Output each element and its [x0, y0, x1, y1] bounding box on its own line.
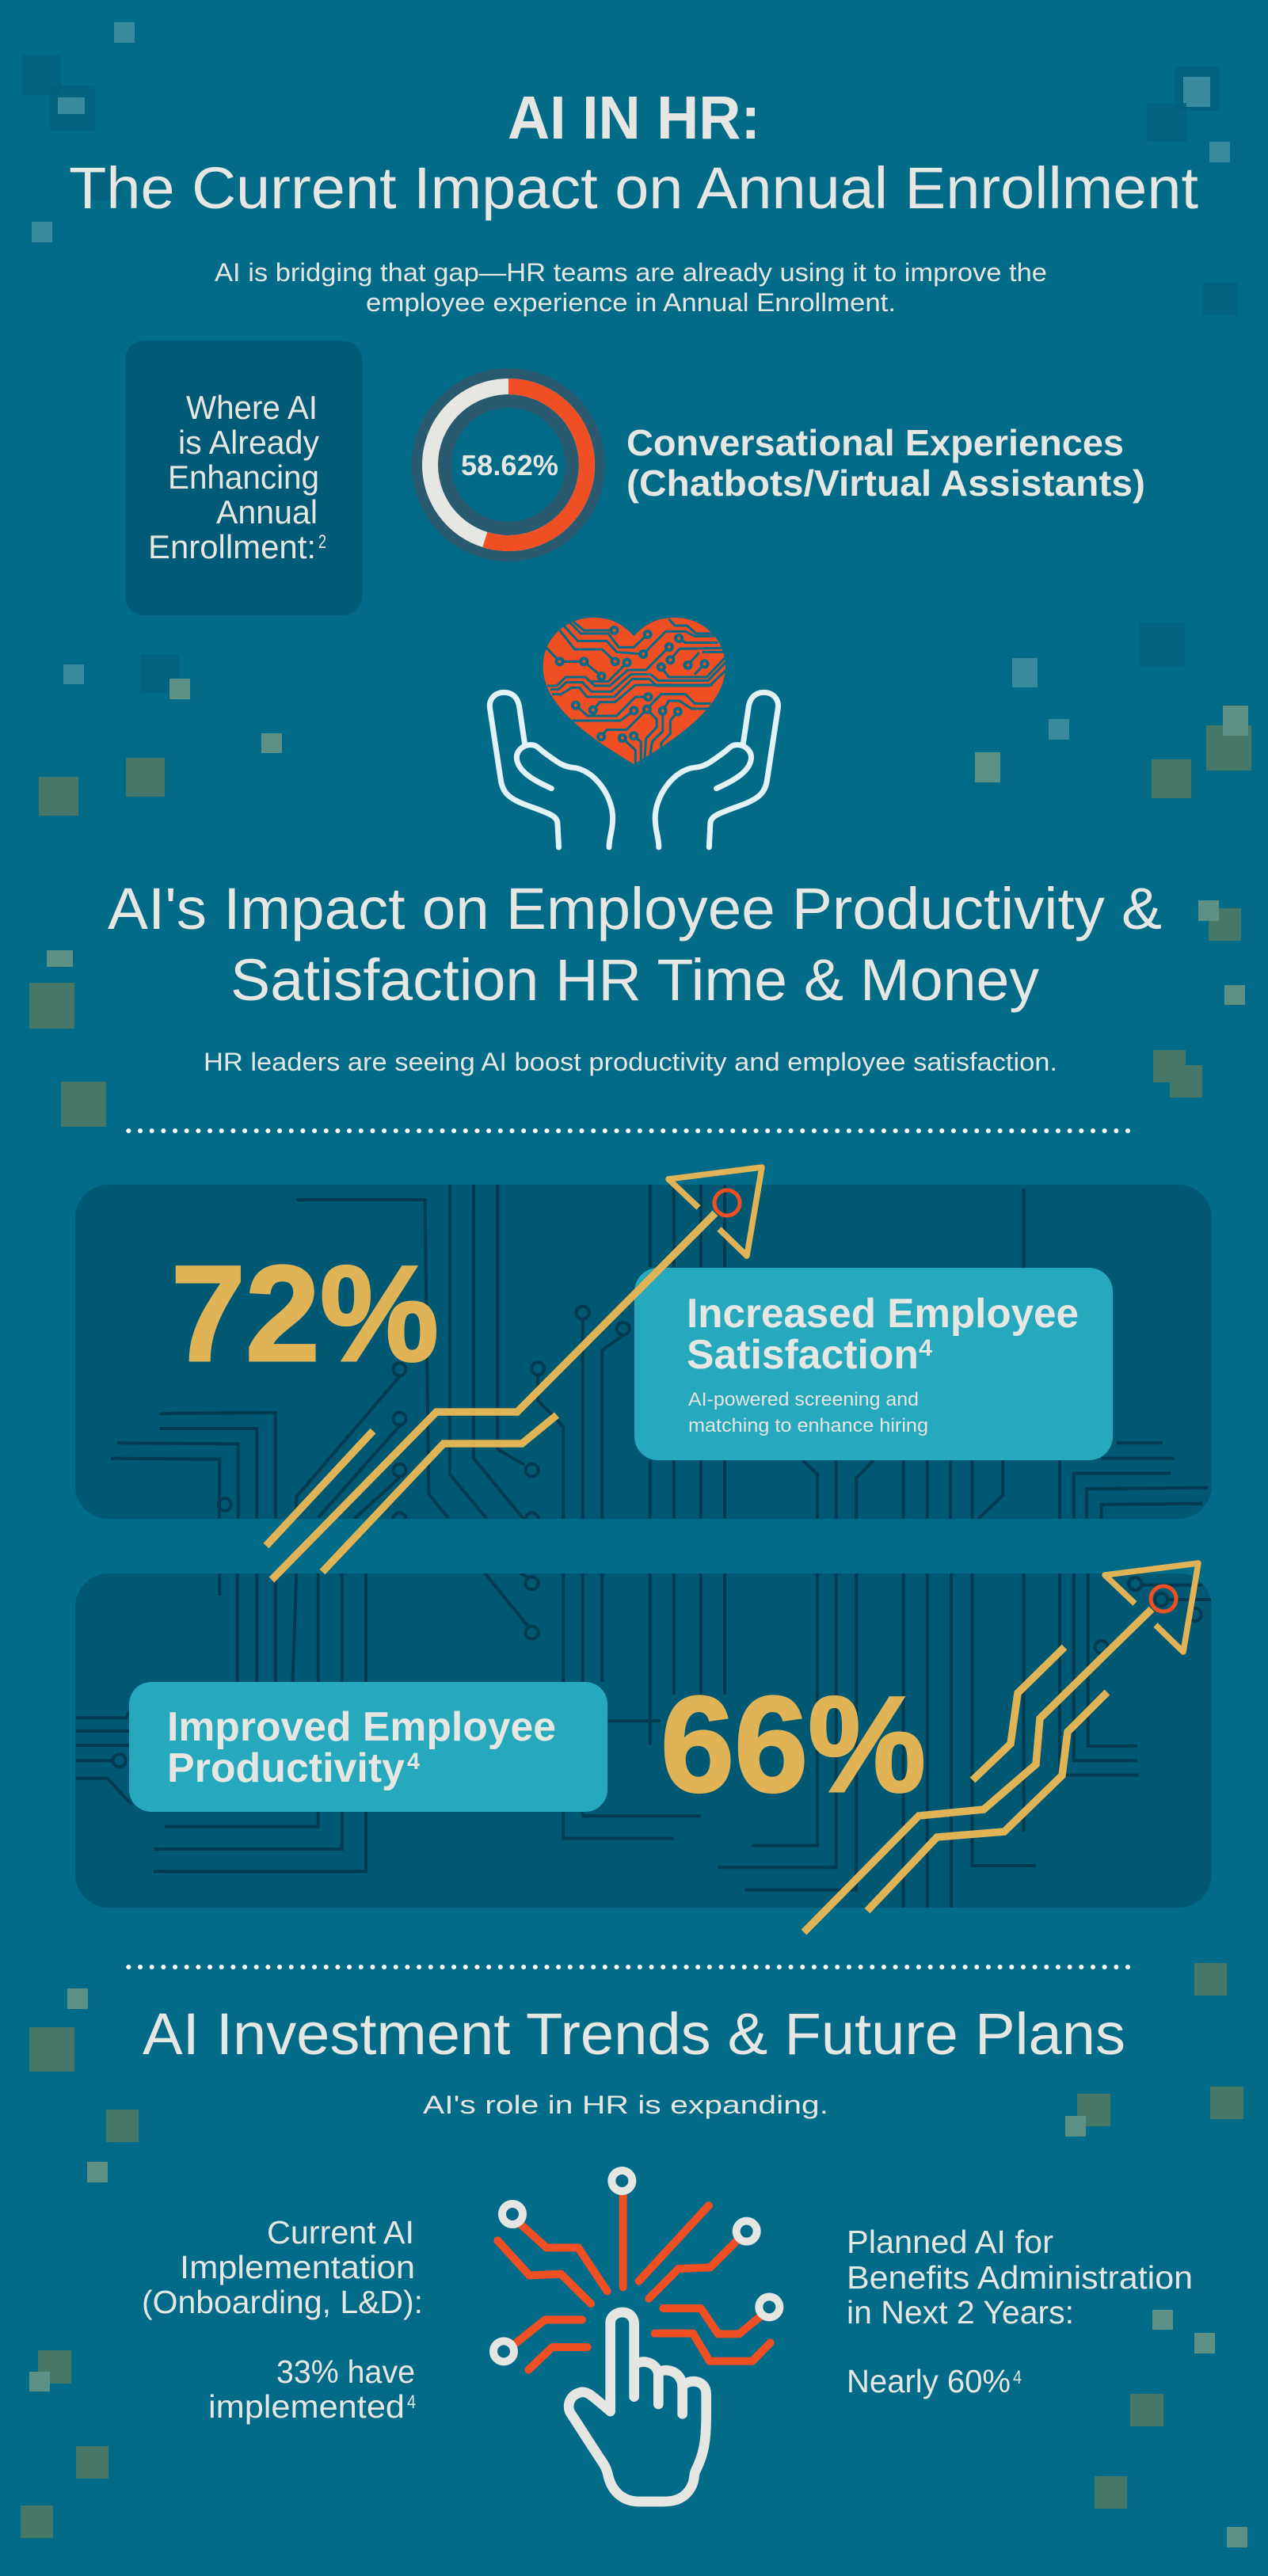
donut label: [626, 422, 1145, 504]
callout: improved employee productivity: [129, 1682, 607, 1812]
text: current AI implementation: (Onboarding, L&D):: [142, 2284, 423, 2320]
callout: increased employee satisfaction: Increased Employee: [687, 1291, 1079, 1337]
heading: impact on productivity and satisfaction: Satisfaction HR Time & Money: [230, 947, 1039, 1013]
text: current AI implementation: Current AI: [267, 2214, 414, 2251]
donut label: Conversational Experiences: [626, 422, 1124, 463]
icon: pointing hand with circuit traces: [493, 2171, 779, 2502]
panel: 72% satisfaction background: [75, 1185, 1212, 1525]
intro text: employee experience in Annual Enrollment.: [366, 288, 896, 317]
text: planned AI for benefits administration: Planned AI for: [847, 2224, 1053, 2260]
title: AI IN HR:: [508, 84, 760, 152]
donut label: (Chatbots/Virtual Assistants): [626, 462, 1145, 504]
stat: 66%: 66%: [661, 1669, 926, 1821]
donut chart: 58.62%: 58.62%: [461, 449, 558, 481]
callout: improved employee productivity: 4: [407, 1748, 420, 1775]
text: current AI implementation: 33% have: [276, 2353, 415, 2390]
callout: improved employee productivity: Productivity: [167, 1745, 405, 1791]
text: planned AI for benefits administration: Nearly 60%: [847, 2363, 1011, 2399]
callout: improved employee productivity: Improved Employee: [167, 1704, 556, 1750]
panel: where AI is already enhancing annual enrollment: Enhancing: [168, 459, 319, 496]
panel: where AI is already enhancing annual enrollment: Where AI: [186, 389, 318, 426]
callout: increased employee satisfaction: Satisfaction: [687, 1332, 919, 1378]
donut chart: 58.62%: [430, 386, 587, 543]
arrow: productivity growth: [804, 1563, 1198, 1932]
panel: where AI is already enhancing annual enrollment: is Already: [178, 424, 319, 461]
arrow: satisfaction growth: [266, 1167, 762, 1580]
panel: where AI is already enhancing annual enrollment: 2: [318, 531, 326, 553]
callout: increased employee satisfaction: matching to enhance hiring: [688, 1415, 928, 1436]
panel: where AI is already enhancing annual enrollment: Enrollment:: [148, 528, 316, 565]
title: The Current Impact on Annual Enrollment: [69, 155, 1198, 221]
panel: where AI is already enhancing annual enrollment: Annual: [216, 493, 318, 531]
productivity subheading: HR leaders are seeing AI boost productivity and employee satisfaction.: [204, 1048, 1057, 1076]
text: current AI implementation: 4: [407, 2391, 416, 2413]
text: planned AI for benefits administration: Benefits Administration: [847, 2259, 1193, 2296]
text: current AI implementation: Implementation: [180, 2249, 415, 2285]
intro text: [215, 258, 1047, 317]
panel: where AI is already enhancing annual enrollment: [125, 341, 362, 615]
intro text: AI is bridging that gap—HR teams are already using it to improve the: [215, 258, 1047, 287]
callout: increased employee satisfaction: 4: [919, 1335, 932, 1361]
heading: impact on productivity and satisfaction: [108, 876, 1162, 1013]
text: current AI implementation: implemented: [208, 2388, 405, 2425]
stat: 72%: 72%: [171, 1238, 439, 1390]
icon: circuit heart in hands: [489, 618, 778, 847]
investment subheading: AI's role in HR is expanding.: [423, 2091, 828, 2119]
text: planned AI for benefits administration: [847, 2224, 1193, 2399]
text: planned AI for benefits administration: 4: [1013, 2367, 1022, 2388]
heading: investment trends: AI Investment Trends & Future Plans: [143, 2001, 1125, 2067]
panel: 66% productivity background: [75, 1573, 1212, 1908]
text: current AI implementation: [142, 2214, 423, 2425]
callout: increased employee satisfaction: AI-powered screening and: [688, 1389, 919, 1410]
heading: impact on productivity and satisfaction: AI's Impact on Employee Productivity &: [108, 876, 1162, 942]
callout: increased employee satisfaction: [634, 1268, 1113, 1460]
text: planned AI for benefits administration: in Next 2 Years:: [847, 2294, 1074, 2331]
title: [69, 84, 1198, 221]
